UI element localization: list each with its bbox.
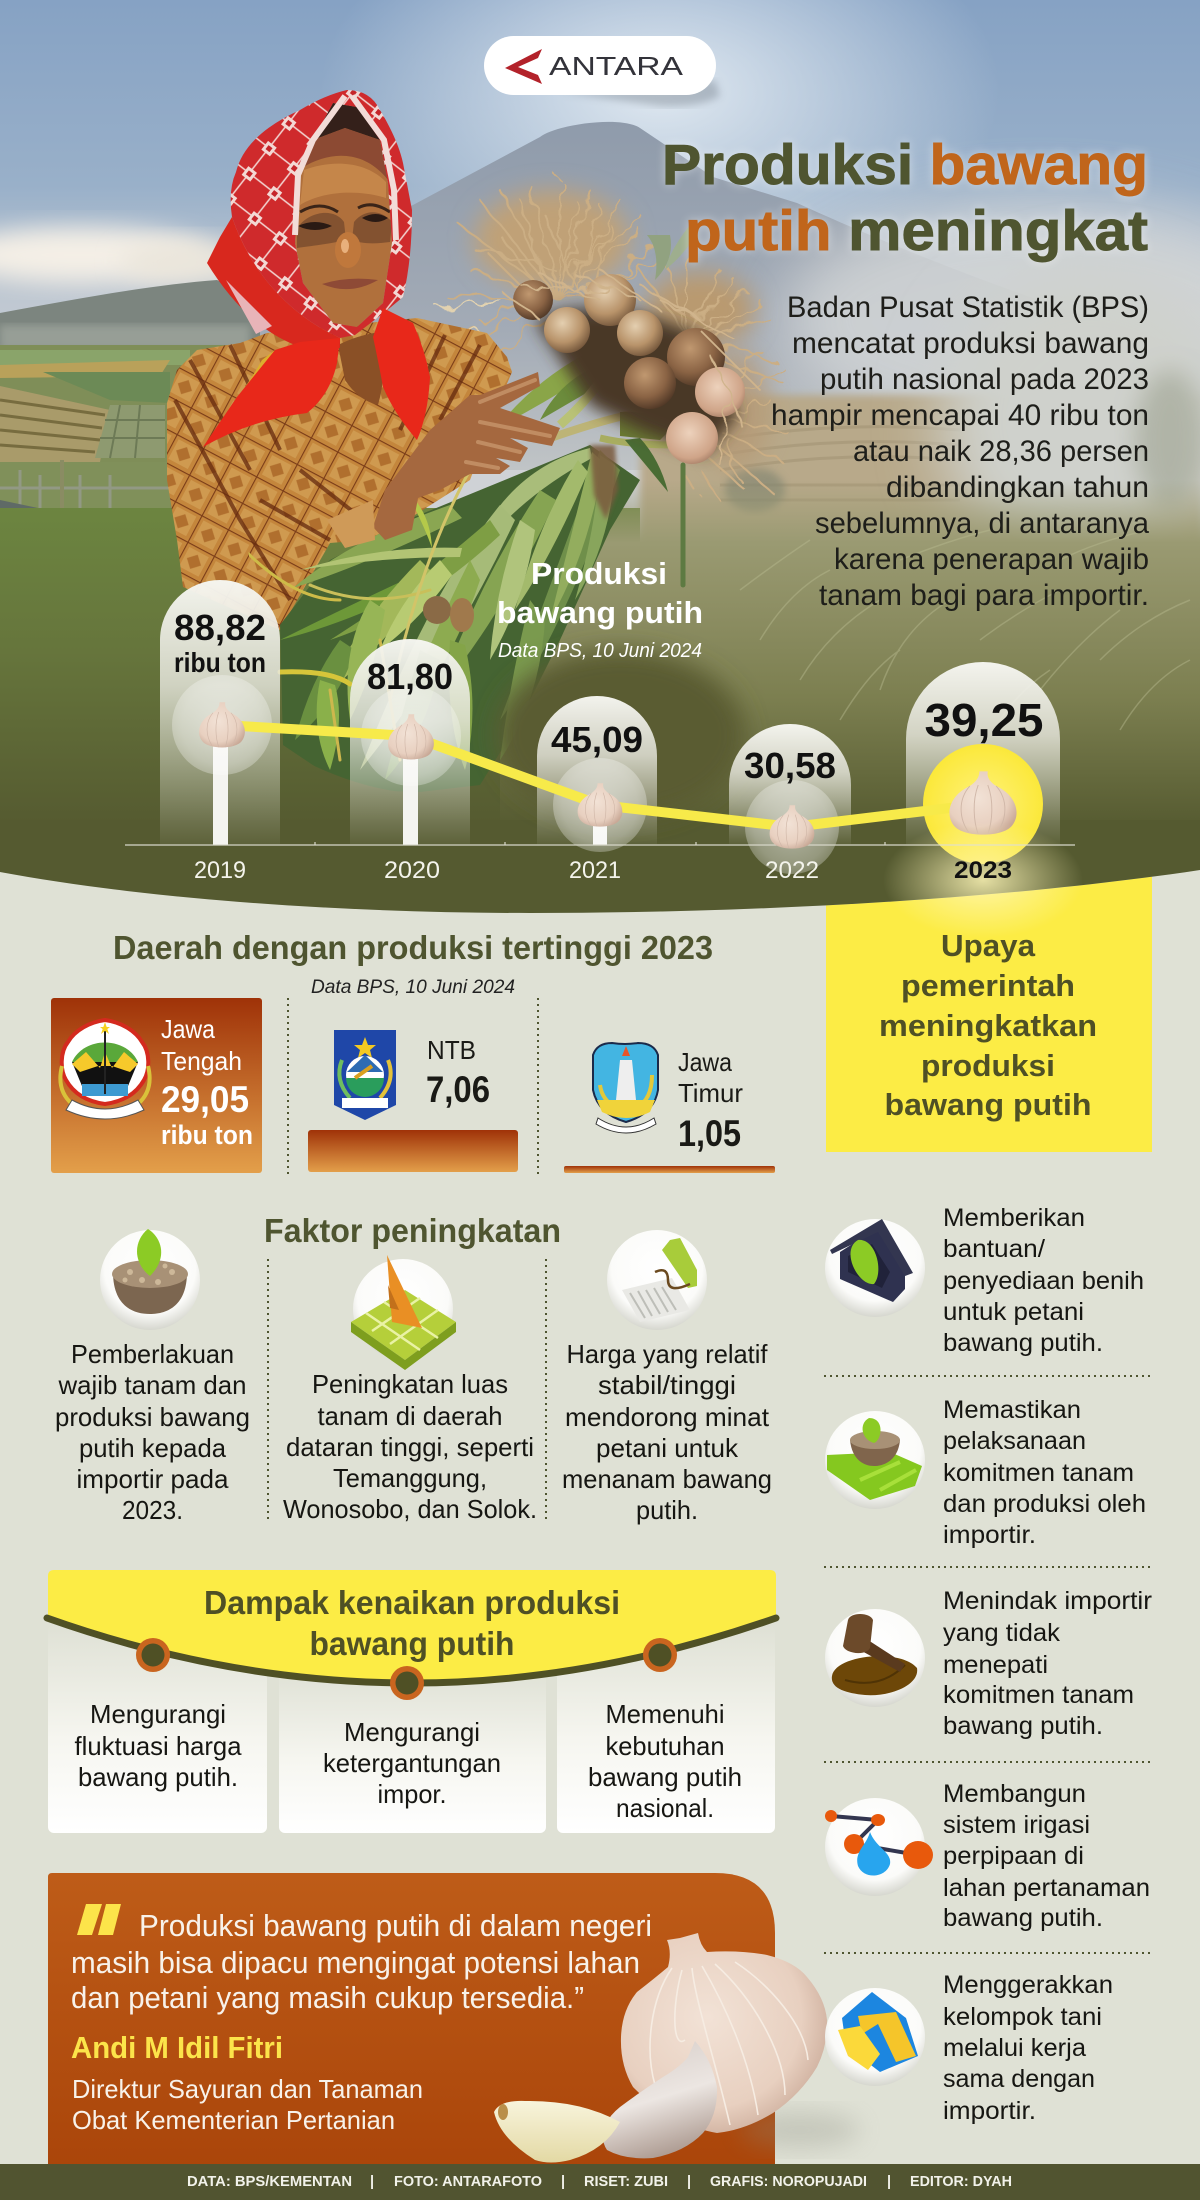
text factor 2 [283, 1369, 537, 1524]
icon: gavel [825, 1609, 925, 1707]
footer credits: DATA: BPS/KEMENTAN [187, 2174, 352, 2190]
logo pill [484, 36, 720, 106]
tree [725, 468, 785, 512]
text factor 2: Temanggung, [333, 1463, 487, 1493]
heading: upaya pemerintah: produksi [921, 1048, 1055, 1083]
intro paragraph: atau naik 28,36 persen [853, 435, 1149, 468]
photo: hand [373, 372, 560, 540]
label Jawa Tengah [161, 1014, 253, 1150]
text factor 3: putih. [636, 1495, 698, 1525]
quote text: dan petani yang masih cukup tersedia.” [71, 1980, 584, 2015]
illustration: garlic bulb and cloves [494, 1933, 860, 2162]
text factor 1: Pemberlakuan [71, 1339, 234, 1369]
pins [136, 1638, 677, 1700]
text item 2 [943, 1396, 1146, 1549]
overlay: olive wash behind chart title [495, 650, 745, 820]
text factor 1: produksi bawang [55, 1402, 250, 1432]
speaker role: Obat Kementerian Pertanian [72, 2105, 395, 2135]
text factor 3: stabil/tinggi [598, 1370, 736, 1400]
factor 3 [562, 1230, 772, 1525]
text item 3: yang tidak [943, 1619, 1061, 1647]
text item 1 [943, 1204, 1144, 1357]
halos [172, 675, 839, 874]
year label 2023: 2023 [954, 857, 1012, 884]
quote text [71, 1908, 652, 2015]
text factor 3: menanam bawang [562, 1464, 772, 1494]
panel: hero photo and chart [0, 0, 1200, 930]
heading: upaya pemerintah: Upaya [941, 928, 1036, 963]
bar 2021 [537, 696, 657, 844]
upper leaves and stems [511, 360, 582, 415]
stems [213, 746, 607, 844]
text factor 1: importir pada [76, 1464, 229, 1494]
text item 5: melalui kerja [943, 2034, 1086, 2062]
dampak card 2 [279, 1670, 546, 1833]
intro paragraph: dibandingkan tahun [886, 471, 1149, 504]
heading: dampak [204, 1584, 620, 1662]
title: Produksi bawang [662, 133, 1148, 197]
grass wisps [740, 530, 1190, 730]
text item 3: bawang putih. [943, 1712, 1103, 1740]
bar 2022 [729, 724, 851, 844]
heading: daerah produksi tertinggi: Daerah dengan produksi tertinggi 2023 [113, 929, 713, 966]
year labels: 2022 [765, 857, 819, 884]
text item 4: bawang putih. [943, 1904, 1103, 1932]
label NTB: NTB [427, 1035, 476, 1065]
footer credits [0, 2164, 1200, 2200]
quote text: masih bisa dipacu mengingat potensi lahan [71, 1945, 640, 1980]
upaya item 2 [825, 1396, 1146, 1549]
icon: Jawa Tengah emblem [60, 1020, 150, 1119]
label NTB [426, 1035, 490, 1110]
photo: garlic leaves and stems [235, 225, 700, 792]
stray garlic in leaves [423, 596, 474, 632]
quote text: Produksi bawang putih di dalam negeri [139, 1908, 652, 1943]
upaya item 4 [825, 1780, 1150, 1932]
label Jawa Tengah: Tengah [161, 1046, 242, 1076]
icon: handshake [825, 1988, 925, 2086]
speaker name: Andi M Idil Fitri [71, 2030, 283, 2065]
text item 5: importir. [943, 2097, 1036, 2125]
icon: land area and ruler [351, 1255, 456, 1370]
photo: scarf tail left [203, 338, 340, 447]
heading: faktor peningkatan: Faktor peningkatan [264, 1212, 561, 1249]
text item 4: lahan pertanaman [943, 1874, 1150, 1902]
footer credits: FOTO: ANTARAFOTO [394, 2174, 542, 2190]
photo: scarf inner band [295, 96, 396, 240]
heading: upaya pemerintah: pemerintah [901, 968, 1075, 1003]
year labels: 2019 [194, 857, 246, 884]
text item 5: Menggerakkan [943, 1971, 1113, 1999]
dampak text: bawang putih. [78, 1762, 238, 1792]
back arm [590, 445, 618, 520]
text item 3 [943, 1587, 1152, 1740]
bar Jawa Timur [564, 1166, 775, 1173]
chart heading: bawang putih [497, 595, 703, 630]
text factor 2: Wonosobo, dan Solok. [283, 1494, 537, 1524]
text item 4: sistem irigasi [943, 1811, 1090, 1839]
photo: dress collar patch [246, 350, 275, 386]
bar 2020 [350, 639, 470, 844]
dampak text: Mengurangi [90, 1699, 226, 1729]
text item 2: Memastikan [943, 1396, 1081, 1424]
value labels: 45,09 [551, 719, 643, 760]
garlic clove [603, 2041, 717, 2158]
photo: scarf pink lining [226, 280, 272, 334]
photo: sleeve fold [327, 500, 375, 548]
rope [47, 1618, 776, 1683]
panel: Jawa Tengah [51, 998, 262, 1173]
photo: neck shadow [338, 332, 384, 405]
label Jawa Tengah: ribu ton [161, 1120, 253, 1150]
label Jawa Tengah: Jawa [161, 1014, 215, 1044]
label Jawa Timur: Jawa [678, 1047, 732, 1077]
trend line [222, 725, 983, 827]
text item 3: menepati [943, 1651, 1048, 1679]
icon: NTB emblem [334, 1030, 396, 1120]
text item 5: sama dengan [943, 2065, 1095, 2093]
value labels: 30,58 [744, 745, 836, 786]
upaya item 1 [825, 1204, 1144, 1357]
text factor 3 [562, 1339, 772, 1525]
photo: scarf tail right [373, 308, 430, 440]
bar NTB [308, 1130, 518, 1172]
source note: Data BPS, 10 Juni 2024 [311, 977, 515, 998]
text factor 3: Harga yang relatif [566, 1339, 768, 1369]
text item 4 [943, 1780, 1150, 1932]
text item 3: Menindak importir [943, 1587, 1152, 1615]
dampak text: kebutuhan [606, 1731, 724, 1761]
footer credits: GRAFIS: NOROPUJADI [710, 2174, 867, 2190]
peeled clove [494, 2101, 620, 2162]
panel: dampak [47, 1570, 776, 1833]
icon: seed house [825, 1219, 925, 1317]
yellow banner [48, 1570, 776, 1683]
photo: roots over bulbs [500, 270, 760, 465]
speaker role: Direktur Sayuran dan Tanaman [72, 2074, 423, 2104]
heading: dampak: bawang putih [310, 1625, 514, 1662]
heading: upaya pemerintah: meningkatkan [879, 1008, 1097, 1043]
text item 1: Memberikan [943, 1204, 1085, 1232]
glow under 2023 [883, 822, 1083, 938]
dampak text: nasional. [616, 1793, 714, 1823]
label Jawa Tengah: 29,05 [161, 1079, 249, 1120]
text item 1: untuk petani [943, 1298, 1084, 1326]
text item 4: perpipaan di [943, 1842, 1084, 1870]
photo: batik dark folds [175, 335, 480, 600]
axis [125, 842, 1075, 845]
intro paragraph: sebelumnya, di antaranya [815, 507, 1149, 540]
title [662, 133, 1148, 263]
intro paragraph: hampir mencapai 40 ribu ton [771, 399, 1149, 432]
intro paragraph: Badan Pusat Statistik (BPS) [787, 291, 1149, 324]
title: putih meningkat [685, 199, 1148, 263]
dampak text: impor. [378, 1779, 446, 1809]
text factor 1: 2023. [122, 1495, 183, 1525]
panel: quote [48, 1873, 775, 2170]
right terraces [636, 390, 1200, 536]
value labels: 81,80 [367, 656, 453, 697]
chart: garlic production by year [125, 580, 1075, 884]
heading: upaya pemerintah: bawang putih [884, 1087, 1092, 1122]
icon: irrigation pipes [825, 1798, 933, 1896]
text factor 1 [55, 1339, 250, 1525]
value labels: 39,25 [924, 694, 1044, 746]
photo: farmer dress [167, 318, 512, 630]
text item 2: dan produksi oleh [943, 1490, 1146, 1518]
text item 2: komitmen tanam [943, 1459, 1134, 1487]
label Jawa Timur [678, 1047, 743, 1154]
panel: upaya heading box [826, 860, 1152, 1152]
dampak text [74, 1699, 742, 1823]
text factor 1: putih kepada [79, 1433, 227, 1463]
footer credits: | [887, 2174, 891, 2190]
chart heading [497, 556, 703, 662]
garlic markers [199, 702, 1017, 849]
icon: antara mark [505, 49, 542, 84]
factor 2 [283, 1255, 537, 1524]
text factor 2: Peningkatan luas [312, 1369, 508, 1399]
text item 2: importir. [943, 1521, 1036, 1549]
text item 5: kelompok tani [943, 2003, 1102, 2031]
icon: quote marks [77, 1904, 121, 1935]
text item 1: penyediaan benih [943, 1267, 1144, 1295]
label Jawa Timur: Timur [678, 1078, 743, 1108]
intro paragraph [771, 291, 1149, 612]
dampak text: Memenuhi [606, 1699, 724, 1729]
heading: upaya pemerintah [879, 928, 1097, 1122]
text item 3: komitmen tanam [943, 1681, 1134, 1709]
intro paragraph: putih nasional pada 2023 [820, 363, 1149, 396]
icon: price tag [607, 1230, 707, 1330]
heading: dampak: Dampak kenaikan produksi [204, 1584, 620, 1621]
footer credits: EDITOR: DYAH [910, 2174, 1012, 2190]
text item 4: Membangun [943, 1780, 1086, 1808]
year labels: 2021 [569, 857, 621, 884]
panel: Jawa Timur [564, 1043, 775, 1173]
dampak text: bawang putih [588, 1762, 742, 1792]
speaker role [72, 2074, 423, 2135]
icon: Jawa Timur emblem [593, 1043, 658, 1133]
upaya item 5 [825, 1971, 1113, 2125]
bar 2019 [160, 580, 280, 844]
highlight circle 2023 [923, 744, 1043, 864]
text item 1: bantuan/ [943, 1235, 1045, 1263]
photo: headscarf [231, 90, 412, 338]
upaya item 3 [825, 1587, 1152, 1740]
bar 2023 [906, 662, 1060, 844]
intro paragraph: mencatat produksi bawang [792, 327, 1149, 360]
chart heading: Produksi [531, 556, 667, 591]
dampak card 3 [557, 1625, 775, 1833]
panel: NTB [308, 1030, 518, 1172]
text factor 2: tanam di daerah [318, 1401, 502, 1431]
logo wordmark: ANTARA [549, 51, 684, 81]
dampak text: fluktuasi harga [74, 1731, 242, 1761]
value labels: ribu ton [174, 647, 266, 678]
icon: seed in soil [100, 1229, 200, 1330]
footer credits: | [370, 2174, 374, 2190]
intro paragraph: tanam bagi para importir. [819, 579, 1149, 612]
intro paragraph: karena penerapan wajib [834, 543, 1149, 576]
value labels: 88,82 [174, 607, 266, 648]
footer credits: RISET: ZUBI [584, 2174, 668, 2190]
year labels [194, 857, 819, 884]
label NTB: 7,06 [426, 1069, 490, 1110]
text factor 3: mendorong minat [565, 1402, 770, 1432]
dampak text: ketergantungan [323, 1748, 501, 1778]
photo: garlic roots [420, 180, 785, 500]
photo: facial features [297, 103, 392, 289]
text factor 3: petani untuk [596, 1433, 739, 1463]
photo: garlic bulbs [513, 274, 745, 464]
dampak card 1 [48, 1625, 267, 1833]
photo: scarf lower fold [207, 217, 340, 348]
chart heading: Data BPS, 10 Juni 2024 [498, 640, 702, 662]
text item 5 [943, 1971, 1113, 2125]
factor 1 [55, 1229, 250, 1525]
text factor 2: dataran tinggi, seperti [286, 1432, 534, 1462]
icon: pot on terraces [825, 1411, 925, 1509]
photo: farmer face [295, 103, 392, 327]
label Jawa Timur: 1,05 [678, 1113, 741, 1154]
text factor 1: wajib tanam dan [58, 1370, 246, 1400]
footer credits: | [561, 2174, 565, 2190]
value labels [174, 607, 1044, 786]
dampak text: Mengurangi [344, 1717, 480, 1747]
text item 2: pelaksanaan [943, 1427, 1086, 1455]
footer credits: | [687, 2174, 691, 2190]
text item 1: bawang putih. [943, 1329, 1103, 1357]
year labels: 2020 [384, 857, 440, 884]
